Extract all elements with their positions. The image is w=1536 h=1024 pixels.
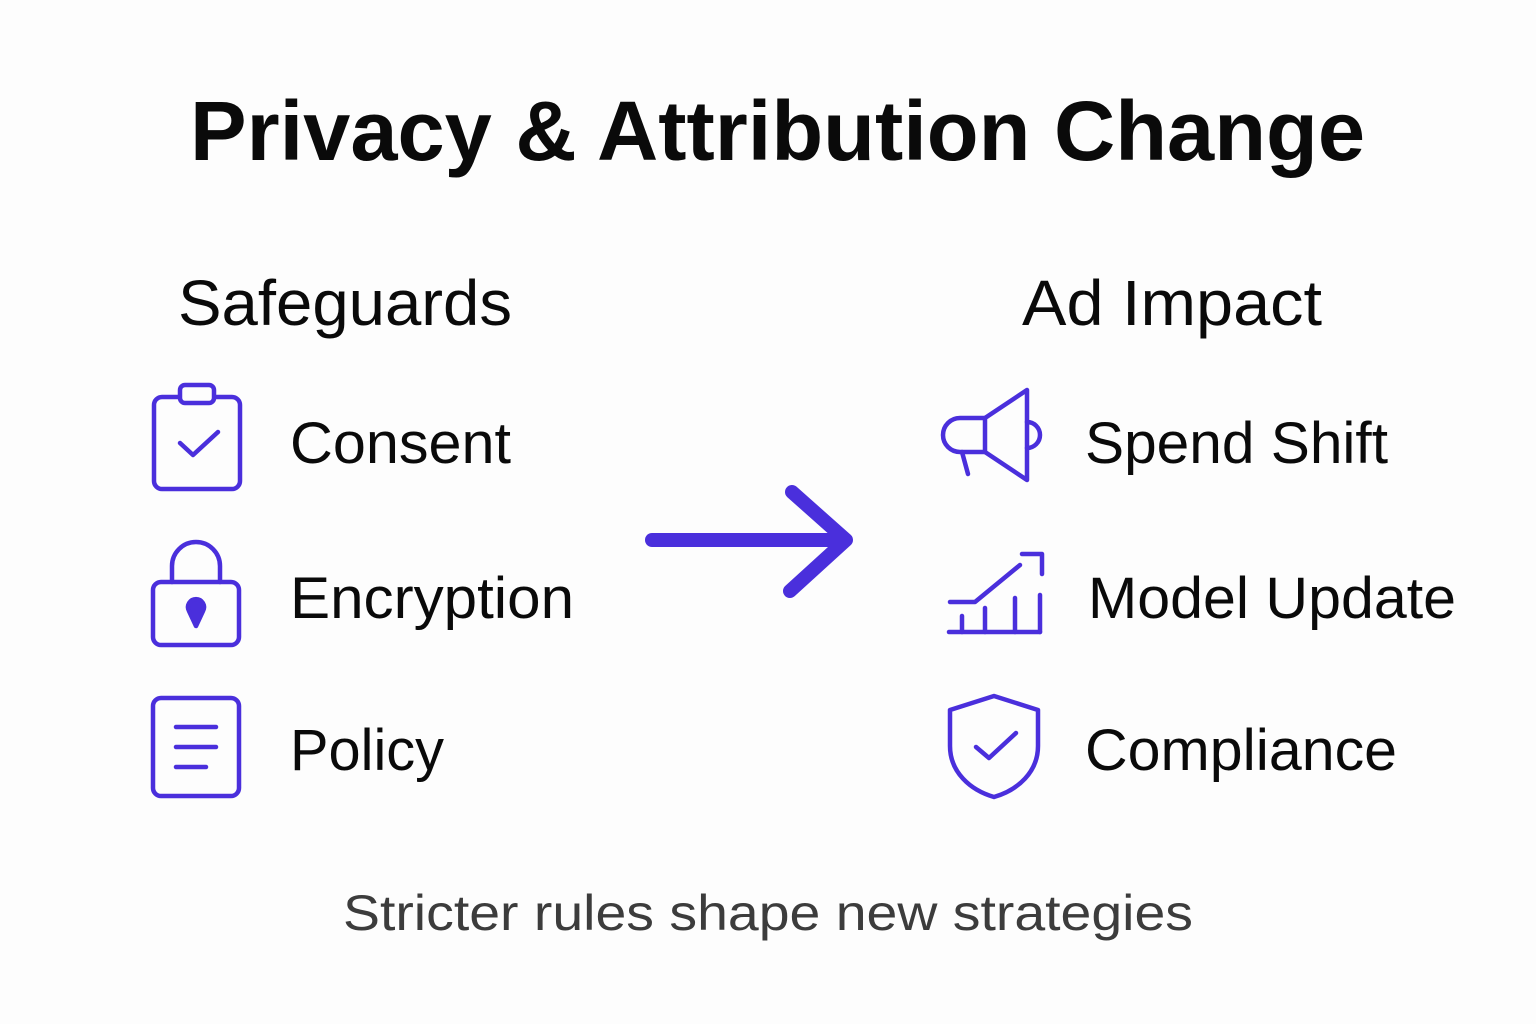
text: Spend Shift: Spend Shift <box>1085 411 1388 476</box>
icon: document <box>153 698 239 796</box>
text: Compliance: Compliance <box>1085 718 1397 783</box>
icon: shield check <box>950 696 1038 797</box>
heading: Ad Impact: Ad Impact <box>1022 267 1322 339</box>
arrow <box>652 492 846 591</box>
icon: megaphone <box>943 390 1040 480</box>
text: Encryption: Encryption <box>290 566 574 631</box>
panel: ad impact list <box>943 390 1456 797</box>
icon: lock <box>153 542 239 645</box>
text: Model Update: Model Update <box>1088 566 1456 631</box>
icon: clipboard check <box>154 385 240 489</box>
title: Privacy & Attribution Change <box>190 84 1365 178</box>
heading: Safeguards: Safeguards <box>178 267 512 339</box>
footer caption: Stricter rules shape new strategies <box>343 885 1193 941</box>
icon: growth chart <box>949 554 1042 632</box>
text: Consent: Consent <box>290 411 511 476</box>
text: Policy: Policy <box>290 718 444 783</box>
panel: safeguards list <box>153 385 574 796</box>
